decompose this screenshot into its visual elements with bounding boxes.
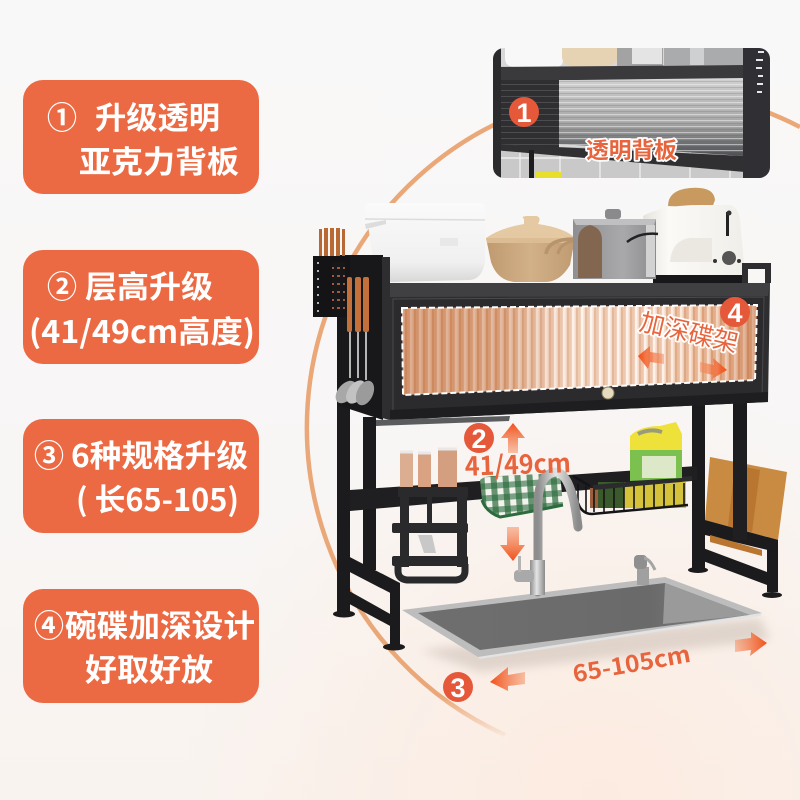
sink (402, 577, 770, 672)
badge 1 (509, 97, 539, 128)
inset: acrylic back panel close-up (493, 44, 770, 180)
card 1: transparent acrylic back panel: 升级透明 (95, 93, 220, 138)
card 2: shelf height upgrade (23, 250, 259, 364)
detergent bottle (630, 422, 682, 481)
cups on the knife holder (400, 449, 457, 488)
utensil holder (313, 228, 350, 317)
horizontal rail (350, 466, 697, 511)
hanging towel (480, 473, 563, 517)
clay pot (486, 216, 575, 282)
deeper-rack arrows (638, 346, 727, 379)
card 3: six size options: 6种规格升级 (71, 431, 248, 476)
card 3: six size options: ③ (34, 431, 64, 476)
badge 2 (464, 423, 494, 454)
rack legs and lower frame (333, 400, 782, 650)
badge 3: 3 (450, 673, 466, 703)
badge 3 (443, 672, 473, 703)
steel pot and bottle (573, 209, 658, 279)
knife holder (392, 487, 468, 580)
door knob (602, 387, 614, 399)
card 3: six size options: ( 长65-105) (76, 475, 239, 520)
badge 4: 4 (727, 298, 743, 328)
soap dispenser (634, 555, 655, 585)
card 3: six size options (23, 419, 259, 533)
card 1: transparent acrylic back panel (23, 80, 259, 194)
rice cooker (365, 203, 485, 282)
card 2: shelf height upgrade: (41/49cm高度) (29, 307, 255, 352)
hanging kitchen tools (332, 277, 378, 408)
badge 4 (720, 297, 750, 328)
label: transparent back panel: 透明背板 (586, 133, 677, 165)
width arrow left (490, 667, 525, 691)
toaster with bread (643, 188, 745, 283)
height arrow up (501, 423, 525, 453)
height arrow down (500, 527, 525, 561)
label: height values: 41/49cm (464, 443, 571, 484)
badge 2: 2 (471, 424, 487, 454)
card 1: transparent acrylic back panel: 亚克力背板 (79, 137, 239, 182)
label: width range: 65-105cm (570, 635, 693, 689)
card 1: transparent acrylic back panel: ① (47, 93, 77, 138)
faucet (514, 472, 578, 595)
card 4: deeper dish design: 好取好放 (85, 645, 213, 690)
label: deeper dish rack: 加深碟架 (636, 302, 742, 360)
width arrow right (735, 632, 767, 656)
sponge basket (573, 476, 692, 514)
rack top shelf cabinet (337, 255, 770, 426)
card 2: shelf height upgrade: 层高升级 (85, 262, 213, 307)
card 4: deeper dish design (23, 589, 259, 703)
card 4: deeper dish design: 碗碟加深设计 (65, 601, 255, 646)
ribbed acrylic door panel (402, 305, 757, 395)
badge 1: 1 (516, 98, 532, 128)
cutting board (705, 440, 787, 556)
card 2: shelf height upgrade: ② (47, 262, 77, 307)
card 4: deeper dish design: ④ (34, 601, 64, 646)
decorative circle arc (307, 89, 800, 735)
